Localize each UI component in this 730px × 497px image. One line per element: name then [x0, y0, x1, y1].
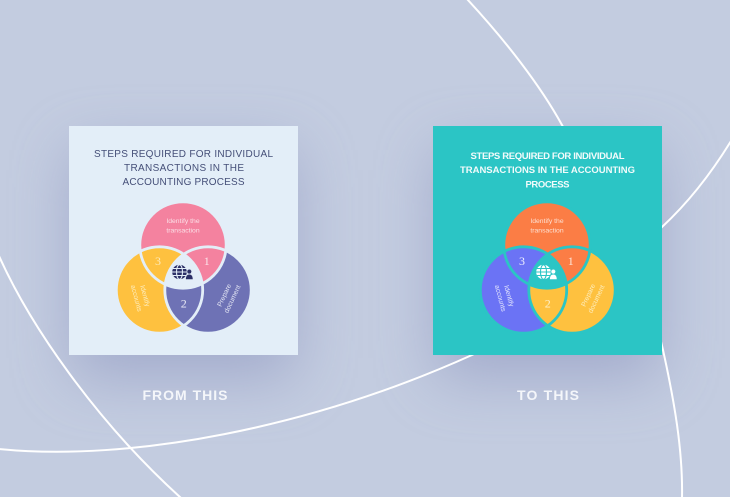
label: identify accounts: accounts: [129, 284, 143, 313]
panel: from this: [69, 126, 298, 355]
icon: globe and person: [536, 265, 557, 280]
icon: globe and person: [172, 265, 193, 280]
numbers: 3: [155, 254, 161, 268]
numbers: 2: [545, 296, 551, 310]
title: from this: TRANSACTIONS IN THE: [124, 163, 244, 174]
numbers: 1: [204, 254, 210, 268]
label: prepare document: Prepare: [581, 283, 597, 308]
title: to this: [460, 151, 635, 190]
title: from this: ACCOUNTING PROCESS: [122, 177, 245, 188]
numbers: [519, 254, 574, 310]
numbers: 3: [519, 254, 525, 268]
label: prepare document: document: [224, 284, 243, 314]
label: prepare document: Prepare: [217, 283, 233, 308]
title: to this: STEPS REQUIRED FOR INDIVIDUAL: [470, 151, 625, 162]
title: to this: PROCESS: [526, 180, 570, 190]
caption: from this: FROM THIS: [142, 387, 228, 403]
card shadows: [72, 150, 659, 378]
label: identify the transaction: transaction: [530, 228, 564, 234]
venn diagram: from this: [116, 202, 251, 333]
numbers: 1: [568, 254, 574, 268]
numbers: 2: [181, 296, 187, 310]
label: identify the transaction: Identify the: [530, 218, 564, 225]
title: to this: TRANSACTIONS IN THE ACCOUNTING: [460, 165, 635, 176]
caption: to this: TO THIS: [517, 387, 579, 403]
label: identify accounts: Identify: [138, 285, 151, 308]
title: from this: STEPS REQUIRED FOR INDIVIDUAL: [94, 149, 273, 160]
title: from this: [94, 149, 273, 188]
label: identify accounts: accounts: [493, 284, 507, 313]
numbers: [155, 254, 210, 310]
panel: to this: [433, 126, 662, 355]
venn diagram: to this: [480, 202, 615, 333]
label: prepare document: document: [588, 284, 607, 314]
label: identify accounts: Identify: [502, 285, 515, 308]
label: identify the transaction: transaction: [166, 228, 200, 234]
label: identify the transaction: Identify the: [166, 218, 200, 225]
